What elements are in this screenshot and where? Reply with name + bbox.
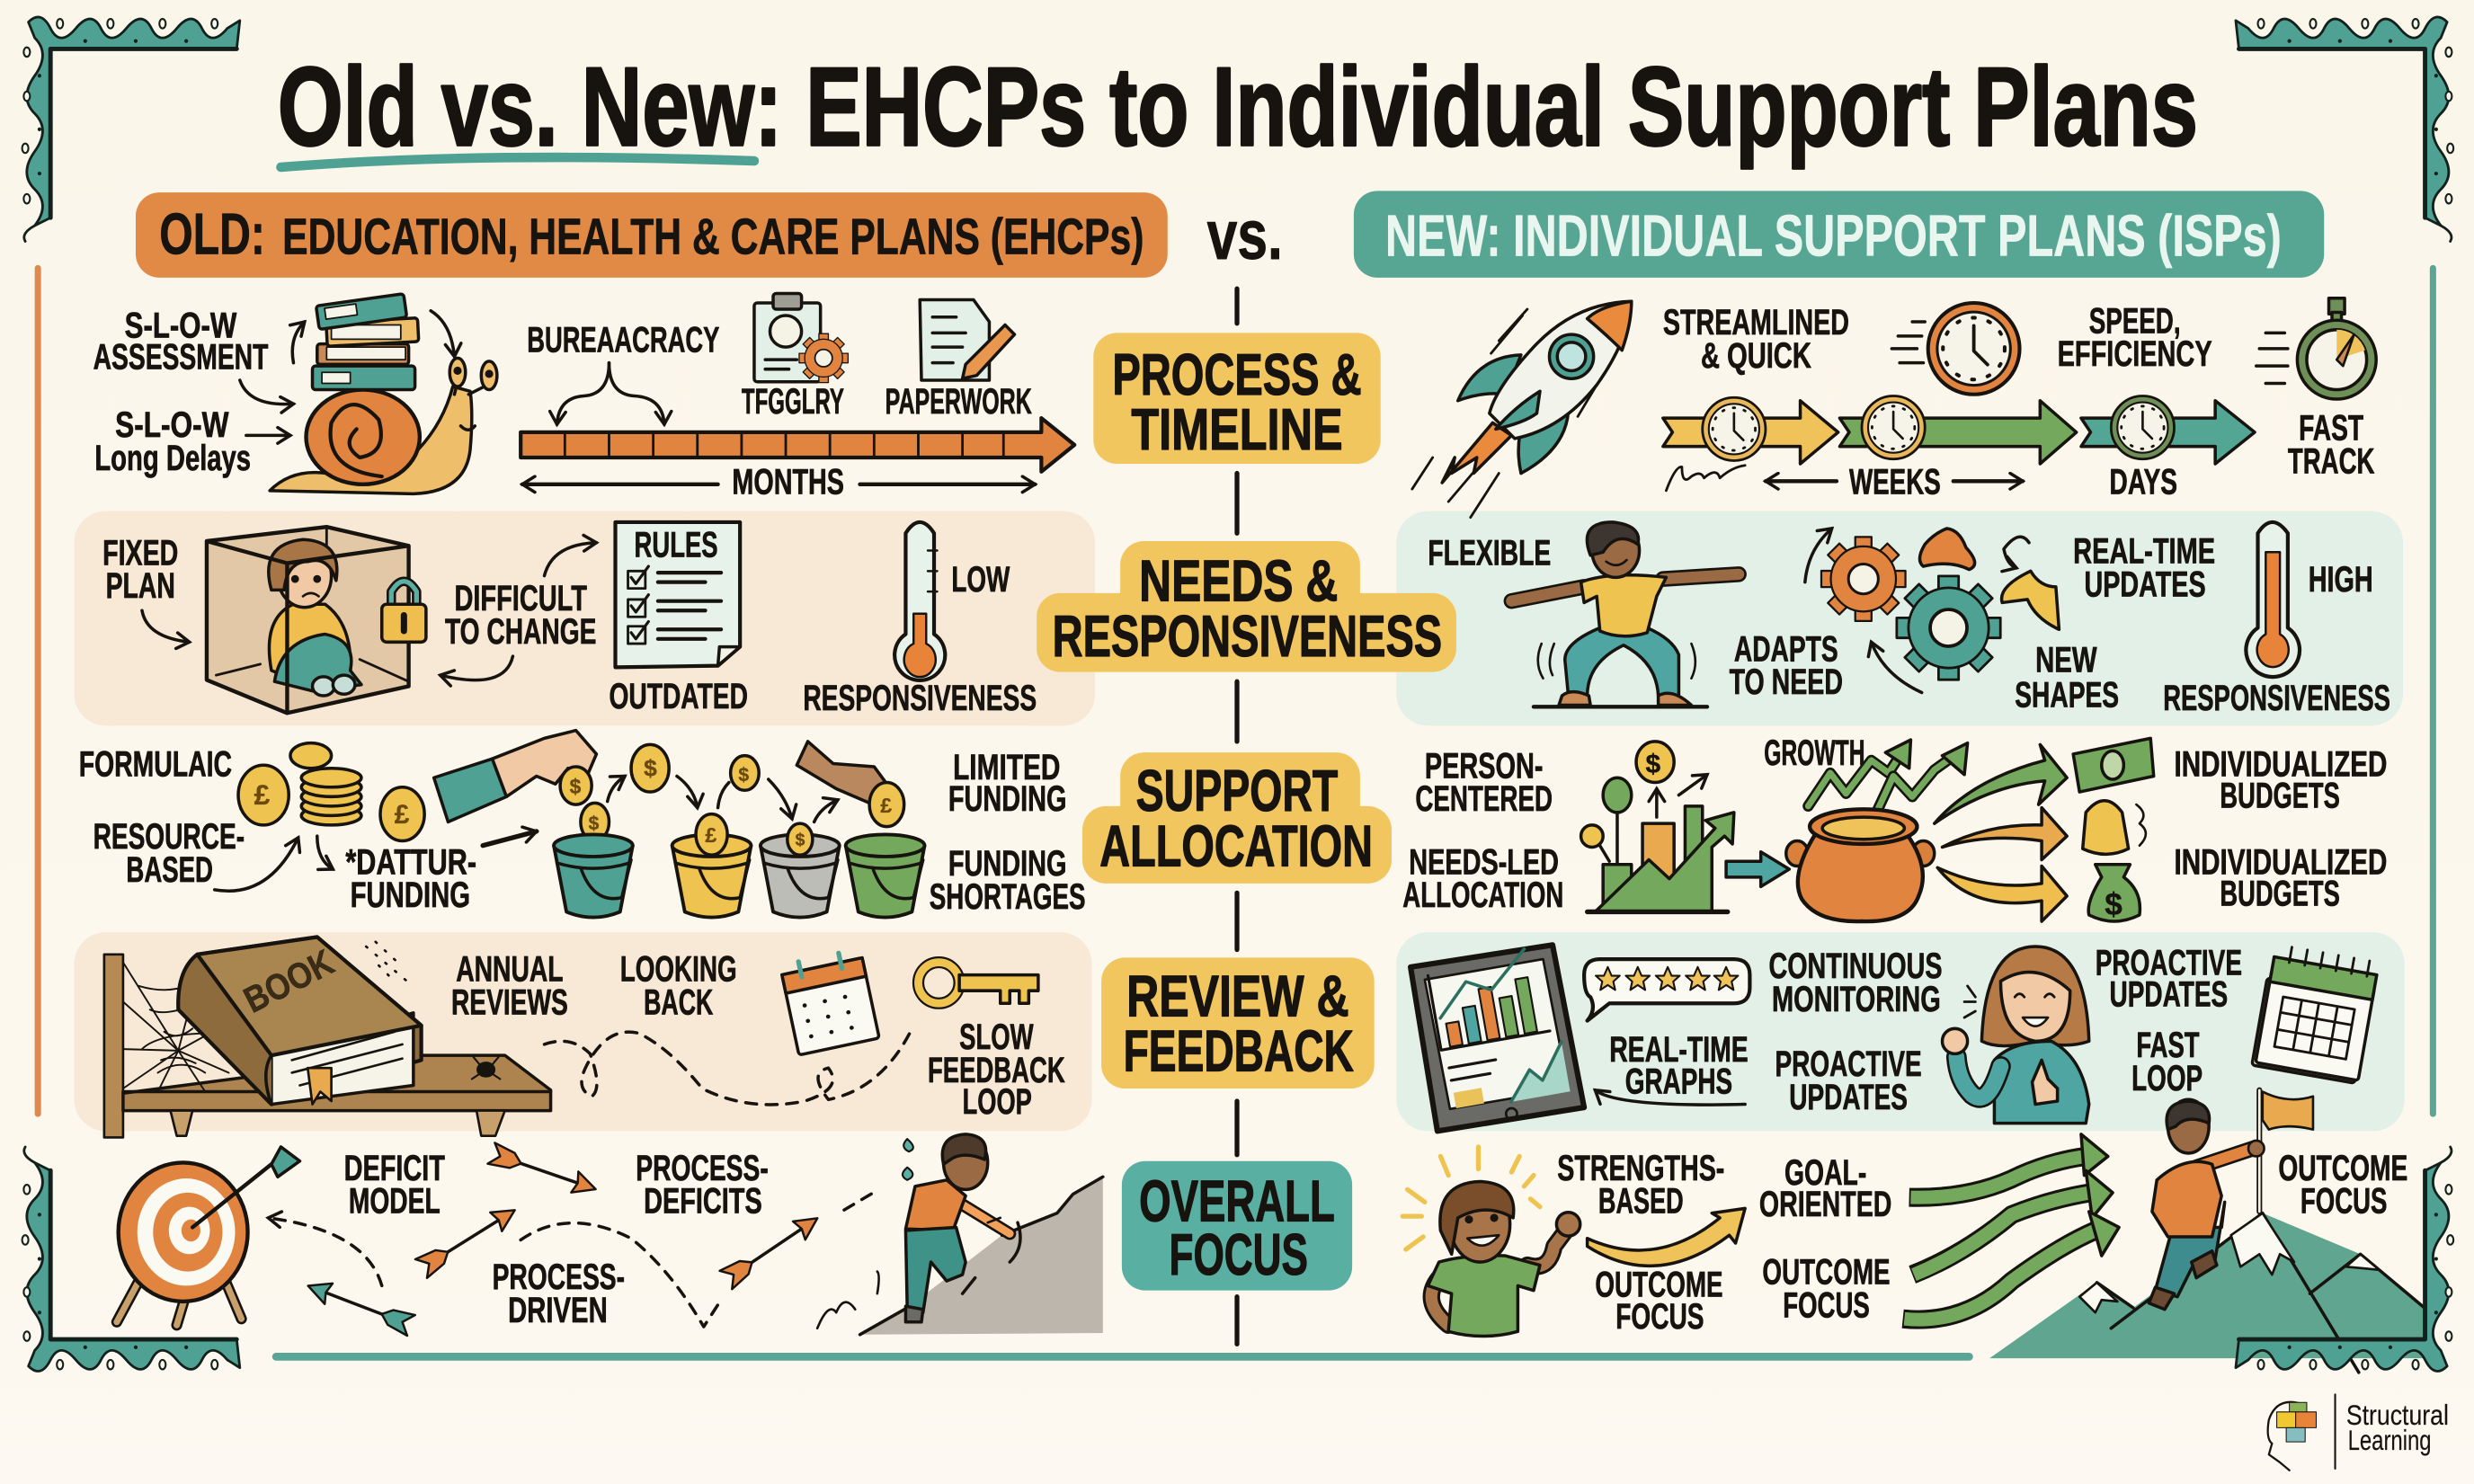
row 5 new: labels: ORIENTED bbox=[1759, 1185, 1891, 1224]
row 2 new: labels: FLEXIBLE bbox=[1428, 533, 1551, 573]
category: needs and responsiveness: RESPONSIVENESS bbox=[1053, 603, 1442, 669]
row 4 new: labels bbox=[1609, 944, 2242, 1117]
icon: five-star speech bubble bbox=[1584, 959, 1749, 1021]
decorative corner: top right bbox=[2236, 17, 2453, 242]
category: needs and responsiveness: NEEDS & bbox=[1139, 548, 1338, 614]
row 3 old: labels: FUNDING bbox=[948, 779, 1066, 819]
row 1 new: labels: FAST bbox=[2299, 409, 2363, 449]
icon: child boxed in bbox=[207, 527, 409, 713]
icon: tablet with graphs bbox=[1411, 945, 1584, 1131]
icon: shelf with dusty book and cobweb: BOOK bbox=[237, 941, 340, 1021]
row 1 new: labels bbox=[1663, 301, 2375, 502]
category: overall focus bbox=[1122, 1161, 1352, 1291]
funding flow arrows bbox=[215, 776, 838, 891]
row 4 new: labels: LOOP bbox=[2131, 1059, 2203, 1098]
category: process and timeline bbox=[1093, 333, 1381, 464]
row 5 new: labels: OUTCOME bbox=[1595, 1266, 1723, 1305]
decorative corner: top left bbox=[22, 17, 240, 242]
logo: Structural Learning: Structural bbox=[2346, 1399, 2449, 1431]
icon: cheering child bbox=[1402, 1147, 1580, 1337]
row 3 new: labels: INDIVIDUALIZED bbox=[2175, 842, 2387, 882]
icon: low thermometer bbox=[894, 522, 945, 680]
row 5 new: labels: FOCUS bbox=[2300, 1182, 2387, 1222]
icon: paperwork and pencil bbox=[920, 299, 1015, 380]
category: support allocation bbox=[1082, 752, 1392, 884]
arrow: into the pot bbox=[1726, 852, 1789, 886]
row 2 new: labels: TO NEED bbox=[1730, 662, 1843, 702]
centre divider bbox=[1235, 289, 1239, 1344]
category: overall focus: FOCUS bbox=[1170, 1222, 1308, 1287]
icon: person climbing rock bbox=[817, 1134, 1103, 1335]
row 2 new: labels: UPDATES bbox=[2084, 564, 2206, 604]
category: overall focus: OVERALL bbox=[1139, 1168, 1335, 1233]
category: support allocation: ALLOCATION bbox=[1099, 813, 1373, 879]
row 2 old: labels: FIXED bbox=[102, 533, 178, 573]
coin symbols: $ bbox=[738, 765, 749, 786]
chart: rising bars: $ bbox=[1646, 750, 1661, 779]
icon: rules checklist bbox=[616, 522, 740, 667]
row 5 old: labels: DEFICIT bbox=[344, 1149, 445, 1188]
header: new ISPs bbox=[1354, 191, 2324, 278]
row 4 new: labels: MONITORING bbox=[1772, 980, 1941, 1019]
row 1 new: labels: STREAMLINED bbox=[1663, 303, 1849, 342]
row 5 old: labels: DEFICITS bbox=[644, 1182, 762, 1222]
header: old EHCPs: EDUCATION, HEALTH & CARE PLANS (EHCPs) bbox=[282, 209, 1144, 265]
icon: interlocking gears bbox=[1805, 529, 2000, 692]
icon: banknote, jar and money bag: $ bbox=[2105, 887, 2122, 922]
row 3 old: labels: FORMULAIC bbox=[79, 744, 232, 784]
row 5 new: labels: FOCUS bbox=[1615, 1297, 1704, 1337]
versus label: vs. bbox=[1207, 197, 1283, 274]
logo: Structural Learning: Learning bbox=[2348, 1424, 2432, 1456]
icon: hands passing coins: £ bbox=[880, 794, 892, 817]
row 2 old: labels: LOW bbox=[951, 560, 1010, 600]
coin symbols: $ bbox=[589, 813, 600, 834]
small darts bbox=[304, 1142, 823, 1336]
row 3 new: labels: INDIVIDUALIZED bbox=[2175, 744, 2387, 784]
row 2 new: labels: HIGH bbox=[2309, 560, 2373, 600]
row 4 old: labels: ANNUAL bbox=[456, 950, 564, 990]
row 4 old: labels bbox=[451, 950, 1065, 1122]
icon: climber planting flag bbox=[2149, 1090, 2313, 1310]
icon: hands passing coins bbox=[434, 731, 904, 827]
row 1 old: labels bbox=[93, 307, 1032, 502]
row 5 old: labels: PROCESS- bbox=[636, 1149, 769, 1188]
row 2 old: labels: DIFFICULT bbox=[454, 579, 587, 618]
row 3 old: labels: BASED bbox=[126, 850, 213, 890]
row 5 old: labels: MODEL bbox=[349, 1182, 441, 1222]
row 4 new: labels: PROACTIVE bbox=[1775, 1044, 1922, 1084]
row 3 new: labels: CENTERED bbox=[1415, 779, 1553, 819]
icon: branching brace bbox=[557, 363, 664, 424]
row 5 new: labels: BASED bbox=[1598, 1182, 1684, 1222]
row 1 old: labels: S-L-O-W bbox=[115, 405, 229, 445]
category: process and timeline: PROCESS & bbox=[1112, 342, 1362, 407]
coin symbols: £ bbox=[254, 778, 271, 811]
icon: clipboard with gear bbox=[754, 293, 848, 383]
panel: needs old bbox=[102, 522, 1037, 718]
icon: wall planner calendar bbox=[2252, 944, 2379, 1084]
row 3 old: labels: FUNDING bbox=[351, 875, 470, 915]
dashed paths bbox=[268, 1189, 879, 1327]
row 4 new: labels: UPDATES bbox=[1789, 1078, 1908, 1117]
row 4 new: labels: PROACTIVE bbox=[2096, 944, 2242, 983]
row 4 new: labels: UPDATES bbox=[2110, 975, 2228, 1015]
row 1 old: labels: MONTHS bbox=[732, 462, 844, 502]
row 4 old: labels: REVIEWS bbox=[451, 983, 568, 1023]
row 1 old: labels: BUREAACRACY bbox=[527, 320, 719, 360]
row 2 new: labels: REAL-TIME bbox=[2073, 532, 2215, 572]
icon: paper calendar bbox=[780, 948, 879, 1055]
row 2 old: labels: TO CHANGE bbox=[445, 612, 596, 652]
row 5 new: labels bbox=[1557, 1149, 2407, 1337]
row 3 old: labels: SHORTAGES bbox=[930, 877, 1086, 917]
dashed feedback loop bbox=[545, 1026, 913, 1105]
chart: long months arrow bbox=[521, 418, 1074, 484]
row 5 old: labels: PROCESS- bbox=[493, 1257, 625, 1297]
icon: mountains bbox=[1989, 1213, 2428, 1373]
row 3 new: labels: BUDGETS bbox=[2220, 777, 2340, 816]
row 1 new: labels: TRACK bbox=[2288, 442, 2375, 482]
arrows around the snail bbox=[240, 311, 454, 435]
icon: rocket bbox=[1412, 301, 1632, 518]
row 3 new: labels: ALLOCATION bbox=[1402, 875, 1563, 915]
icon: shelf with dusty book and cobweb bbox=[104, 937, 551, 1137]
category: review and feedback bbox=[1101, 957, 1375, 1089]
panel: review old bbox=[104, 937, 1065, 1137]
category: review and feedback: FEEDBACK bbox=[1124, 1018, 1354, 1084]
icon: high thermometer bbox=[2246, 522, 2300, 677]
icon: snail carrying binders bbox=[270, 294, 497, 493]
row 3 new: labels: PERSON- bbox=[1425, 746, 1543, 786]
row 4 old: labels: SLOW bbox=[959, 1017, 1034, 1057]
row 4 new: labels: CONTINUOUS bbox=[1768, 946, 1943, 986]
row 5 new: labels: OUTCOME bbox=[1762, 1253, 1891, 1293]
icon: padlock bbox=[382, 582, 426, 642]
icon: wall clock bbox=[1891, 303, 2020, 395]
row 2 old: labels: RESPONSIVENESS bbox=[803, 679, 1037, 718]
coin symbols bbox=[254, 754, 749, 834]
timeline: weeks to days arrows bbox=[1663, 396, 2255, 491]
icon: old key bbox=[918, 963, 1038, 1003]
icon: rules checklist: RULES bbox=[635, 526, 718, 565]
row 4 old: labels: BACK bbox=[644, 983, 714, 1023]
row 1 old: labels: Long Delays bbox=[94, 439, 251, 478]
row 4 old: labels: LOOP bbox=[963, 1082, 1032, 1122]
row 3 new: labels: GROWTH bbox=[1764, 733, 1865, 773]
category: needs and responsiveness bbox=[1037, 541, 1456, 672]
row 5 new: labels: GOAL- bbox=[1784, 1153, 1866, 1193]
row 1 old: labels: S-L-O-W bbox=[125, 307, 237, 346]
panel backgrounds bbox=[75, 511, 2405, 1131]
chart: rising bars bbox=[1581, 742, 1734, 911]
row 4 old: labels: FEEDBACK bbox=[928, 1051, 1065, 1090]
row 2 old: labels: PLAN bbox=[106, 566, 175, 606]
arrow: back to tablet bbox=[1595, 1090, 1745, 1105]
coin symbols: £ bbox=[395, 800, 410, 830]
row 3 old: labels: LIMITED bbox=[953, 748, 1060, 787]
frame: side and bottom rules bbox=[38, 268, 2433, 1356]
row 2 new: labels: NEW bbox=[2035, 641, 2097, 680]
row 5 new: labels: FOCUS bbox=[1783, 1285, 1870, 1325]
header: old EHCPs: OLD: bbox=[159, 201, 265, 267]
row 2 new: labels: SHAPES bbox=[2015, 675, 2119, 715]
row 1 old: labels: ASSESSMENT bbox=[93, 338, 268, 378]
arrow: strengths to goals bbox=[1588, 1208, 1745, 1266]
row 3 new: labels: BUDGETS bbox=[2220, 874, 2340, 913]
icon: growth zigzag arrows bbox=[1808, 740, 1968, 823]
row 5 new: labels: STRENGTHS- bbox=[1557, 1149, 1724, 1188]
icon: flexible figure balancing bbox=[1511, 522, 1739, 706]
icon: funding buckets: $ bbox=[796, 831, 805, 850]
icon: new shapes bbox=[1919, 529, 2059, 629]
row 4 new: labels: REAL-TIME bbox=[1609, 1030, 1749, 1070]
category: support allocation: SUPPORT bbox=[1136, 758, 1338, 823]
row 3 old: labels: RESOURCE- bbox=[93, 817, 245, 857]
row 4 new: labels: FAST bbox=[2136, 1026, 2200, 1065]
row 2 new: labels: ADAPTS bbox=[1734, 629, 1838, 669]
row 5 old: labels bbox=[344, 1149, 769, 1330]
row 3 old: labels: *DATTUR- bbox=[345, 842, 476, 882]
logo: Structural Learning bbox=[2268, 1394, 2449, 1471]
panel: needs new bbox=[1428, 522, 2390, 718]
row 4 old: labels: LOOKING bbox=[620, 950, 737, 990]
row 3 old: labels bbox=[79, 744, 1086, 917]
row 1 old: labels: TFGGLRY bbox=[742, 382, 844, 422]
row 1 new: labels: DAYS bbox=[2110, 462, 2177, 502]
icon: hands passing coins: $ bbox=[570, 775, 582, 798]
header: old EHCPs bbox=[136, 192, 1168, 278]
row 1 new: labels: & QUICK bbox=[1701, 336, 1811, 376]
row 3 old: labels: FUNDING bbox=[948, 844, 1066, 884]
row 2 new: labels bbox=[1428, 532, 2390, 718]
coin symbols: $ bbox=[644, 754, 657, 781]
row 1 new: labels: WEEKS bbox=[1849, 462, 1941, 502]
icon: coins and stack bbox=[238, 743, 759, 840]
category: process and timeline: TIMELINE bbox=[1131, 396, 1343, 462]
row 3 new: labels: NEEDS-LED bbox=[1409, 842, 1559, 882]
arrows: progress toward summit bbox=[1903, 1134, 2119, 1320]
decorative corner: bottom right bbox=[2236, 1147, 2453, 1372]
icon: orange budget pot bbox=[1786, 809, 1935, 921]
icon: stopwatch bbox=[2256, 298, 2376, 399]
arrows around the box bbox=[142, 543, 596, 680]
icon: smiling teacher bbox=[1943, 946, 2089, 1124]
icon: funding buckets: £ bbox=[706, 823, 717, 847]
row 1 new: labels: EFFICIENCY bbox=[2058, 334, 2212, 374]
arrows out of the pot bbox=[1935, 744, 2067, 921]
row 5 new: labels: OUTCOME bbox=[2278, 1149, 2407, 1188]
icon: archery target bbox=[117, 1147, 299, 1325]
row 1 new: labels: SPEED, bbox=[2089, 301, 2181, 341]
panel: review new bbox=[1411, 944, 2379, 1131]
icon: funding buckets bbox=[554, 814, 924, 918]
row 3 new: labels bbox=[1402, 733, 2387, 915]
row 1 old: labels: PAPERWORK bbox=[885, 382, 1032, 422]
row 5 old: labels: DRIVEN bbox=[508, 1291, 608, 1330]
row 2 old: labels bbox=[102, 533, 1037, 718]
category: review and feedback: REVIEW & bbox=[1126, 963, 1349, 1028]
decorative corner: bottom left bbox=[22, 1147, 240, 1372]
row 4 new: labels: GRAPHS bbox=[1625, 1062, 1732, 1101]
row 2 old: labels: OUTDATED bbox=[609, 677, 748, 716]
icon: banknote, jar and money bag bbox=[2073, 738, 2154, 922]
